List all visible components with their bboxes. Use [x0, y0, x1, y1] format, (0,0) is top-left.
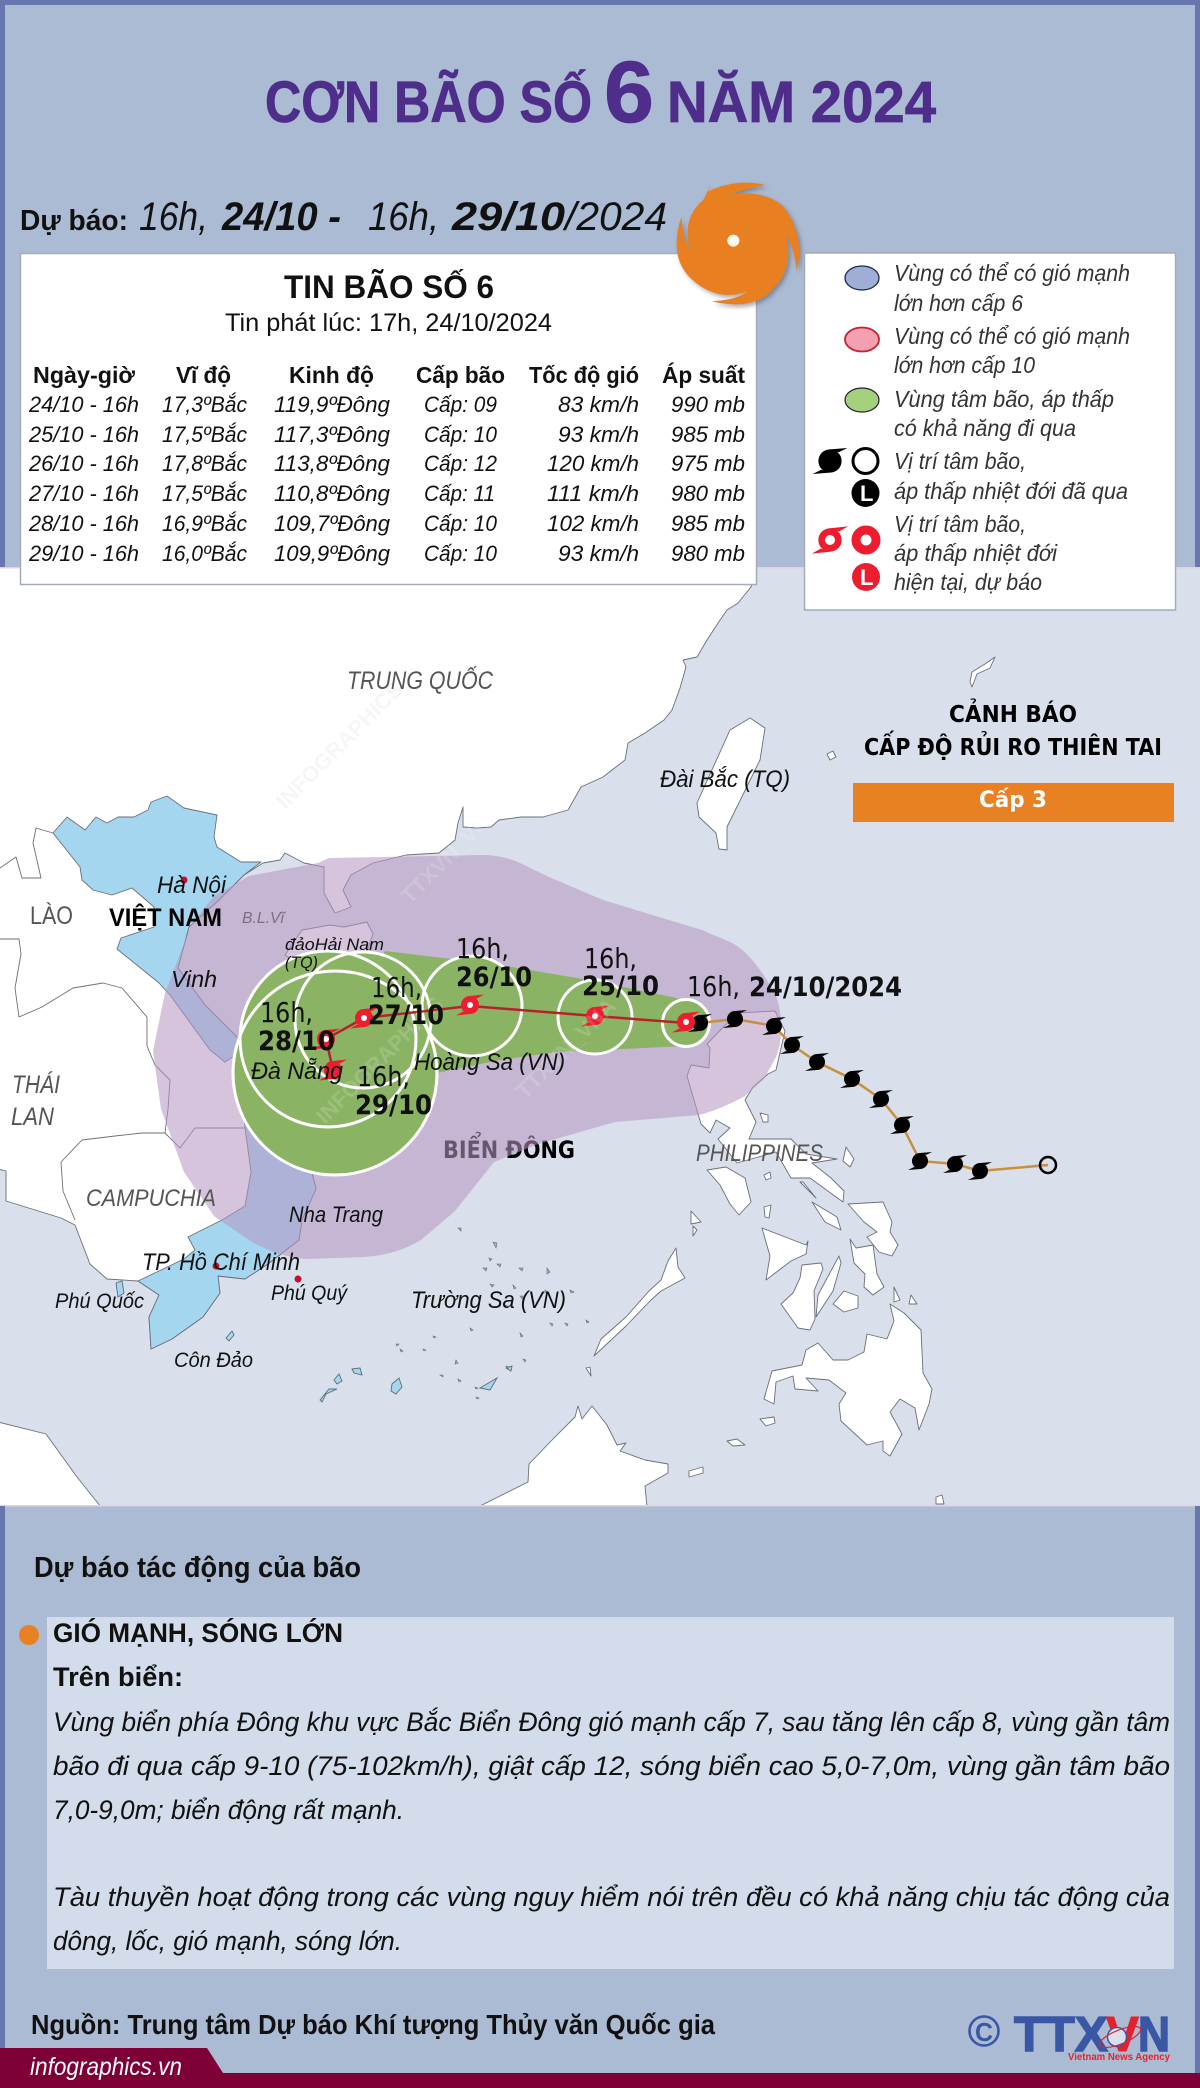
title: CƠN BÃO SỐ: [265, 70, 592, 135]
map labels: places: TP. Hồ Chí Minh: [142, 1249, 300, 1276]
logo: TTXVN: TTX: [1014, 2008, 1108, 2062]
watermarks: INFOGRAPHICS: [271, 677, 408, 814]
logo: TTXVN: V: [1106, 2008, 1139, 2062]
map labels: places: [11, 665, 823, 1372]
table data rows: 985 mb: [671, 511, 745, 536]
watermarks: TTXVN_VNA: [396, 798, 506, 909]
panel: strong wind and waves: [47, 1617, 1174, 1969]
legend: wind above level 10: [845, 323, 1130, 378]
map labels: places: Đà Nẵng: [251, 1057, 344, 1085]
table data rows: 117,3ºĐông: [274, 422, 391, 447]
legend: current and forecast positions: áp thấp nhiệt đới: [894, 540, 1058, 566]
table data rows: [28, 392, 745, 566]
table data rows: 980 mb: [671, 481, 745, 506]
map labels: places: Phú Quốc: [55, 1290, 144, 1313]
table data rows: 111 km/h: [547, 481, 639, 506]
table data rows: 17,5ºBắc: [162, 422, 247, 447]
table data rows: 17,3ºBắc: [162, 392, 247, 417]
table data rows: 16,9ºBắc: [162, 511, 247, 536]
islands: Con Dao, Phu Quoc, Spratly: [116, 1228, 589, 1402]
map labels: places: Vinh: [171, 966, 217, 992]
table header row: Kinh độ: [289, 362, 374, 388]
forecast date line: Dự báo:: [20, 205, 128, 237]
table data rows: 980 mb: [671, 541, 745, 566]
map labels: places: Phú Quý: [271, 1282, 348, 1305]
map labels: storm dates: 25/10: [582, 971, 659, 1002]
map labels: places: LÀO: [30, 901, 73, 930]
forecast date line: 16h,: [139, 195, 208, 239]
panel: strong wind and waves: GIÓ MẠNH, SÓNG LỚN: [53, 1617, 343, 1648]
map top edge line: [0, 567, 1200, 568]
bottom section background: [0, 1505, 1200, 2088]
panel: strong wind and waves: Vùng biển phía Đông khu vực Bắc Biển Đông gió mạnh cấp 7, sau tăng lên cấp 8, vùng gần tâm: [53, 1706, 1170, 1737]
table data rows: 83 km/h: [558, 392, 639, 417]
table data rows: 93 km/h: [558, 422, 639, 447]
map labels: storm dates: 26/10: [456, 962, 532, 993]
table data rows: Cấp: 09: [424, 392, 497, 417]
map labels: places: TRUNG QUỐC: [347, 665, 494, 695]
table data rows: 975 mb: [671, 451, 745, 476]
land: Hainan: [285, 922, 373, 965]
table header row: Cấp bão: [416, 362, 505, 388]
table data rows: 26/10 - 16h: [28, 451, 139, 476]
legend: past positions: L: [860, 481, 873, 506]
forecast date line: /2024: [562, 195, 667, 239]
logo: TTXVN: N: [1138, 2008, 1170, 2062]
watermarks: INFOGRAPHICS: [311, 992, 448, 1129]
map labels: places: Hoàng Sa (VN): [414, 1049, 565, 1076]
map labels: places: Đài Bắc (TQ): [660, 766, 790, 793]
panel: legend: [804, 253, 1176, 610]
icon: orange cyclone: [677, 183, 799, 304]
table data rows: Cấp: 10: [424, 422, 498, 447]
table header row: Áp suất: [662, 361, 745, 388]
panel: strong wind and waves: bão đi qua cấp 9-10 (75-102km/h), giật cấp 12, sóng biển cao 5,0-7,0m, vùng gần tâm bão: [53, 1751, 1170, 1781]
map labels: storm dates: 16h,: [371, 971, 422, 1004]
map labels: storm dates: 24/10/2024: [749, 972, 902, 1003]
table data rows: 27/10 - 16h: [28, 481, 139, 506]
table data rows: 109,7ºĐông: [274, 511, 391, 536]
forecast date line: [20, 195, 667, 239]
land: small northern islands: [827, 657, 995, 760]
footer bar: infographics.vn: [30, 2053, 182, 2081]
land: Borneo: [478, 1406, 668, 1507]
map: [0, 568, 1200, 1507]
panel: strong wind and waves: Tàu thuyền hoạt động trong các vùng nguy hiểm nói trên đều có khả năng chịu tác động của: [53, 1882, 1170, 1912]
label: Bien Dong: BIỂN ĐÔNG: [443, 1130, 575, 1164]
forecast track: [312, 994, 700, 1080]
panel: strong wind and waves: dông, lốc, gió mạnh, sóng lớn.: [53, 1926, 402, 1956]
map labels: places: LAN: [11, 1103, 55, 1131]
table data rows: 120 km/h: [547, 451, 639, 476]
title: NĂM 2024: [667, 70, 936, 135]
map labels: places: THÁI: [12, 1070, 60, 1099]
land: Malay peninsula: [0, 1422, 101, 1507]
map labels: places: Nha Trang: [289, 1202, 384, 1227]
logo: TTXVN: C: [975, 2017, 993, 2047]
legend: storm center zone: [845, 386, 1114, 441]
land: borders: [0, 828, 245, 1220]
table data rows: 28/10 - 16h: [28, 511, 139, 536]
map labels: storm dates: 27/10: [368, 1000, 444, 1031]
forecast date line: 24/10 -: [221, 195, 341, 239]
disaster risk warning: CẢNH BÁO: [949, 698, 1077, 728]
table data rows: Cấp: 11: [424, 481, 495, 506]
legend: storm center zone: có khả năng đi qua: [894, 415, 1076, 441]
watermarks: TTXVN_VNA: [511, 993, 621, 1104]
table data rows: 93 km/h: [558, 541, 639, 566]
logo: TTXVN: Vietnam News Agency: [1068, 2051, 1170, 2063]
impact heading: Dự báo tác động của bão: [34, 1552, 361, 1584]
legend: wind above level 6: Vùng có thể có gió mạnh: [894, 260, 1130, 286]
table data rows: 17,5ºBắc: [162, 481, 247, 506]
table header row: Tốc độ gió: [529, 362, 639, 388]
legend: current and forecast positions: [812, 511, 1058, 595]
map labels: storm dates: [258, 932, 902, 1121]
table header row: Ngày-giờ: [33, 362, 136, 388]
map labels: places: Hà Nội: [157, 872, 227, 899]
land: Vietnam: [53, 796, 316, 1349]
forecast radius circles: [233, 951, 710, 1175]
legend: wind above level 10: lớn hơn cấp 10: [894, 352, 1035, 378]
legend: past positions: Vị trí tâm bão,: [894, 448, 1026, 474]
source: Nguồn: Trung tâm Dự báo Khí tượng Thủy văn Quốc gia: [31, 2009, 715, 2040]
table data rows: Cấp: 12: [424, 451, 497, 476]
table header row: Vĩ độ: [176, 362, 231, 388]
frame bars: [0, 0, 1200, 568]
table data rows: 17,8ºBắc: [162, 451, 247, 476]
map labels: places: Côn Đảo: [174, 1349, 253, 1372]
legend: wind above level 10: Vùng có thể có gió mạnh: [894, 323, 1130, 349]
table data rows: Cấp: 10: [424, 511, 498, 536]
logo: TTXVN: [970, 2008, 1170, 2063]
map labels: storm dates: 16h,: [357, 1060, 410, 1093]
table heading: [225, 269, 552, 337]
legend: storm center zone: Vùng tâm bão, áp thấp: [894, 386, 1114, 412]
legend: current and forecast positions: Vị trí tâm bão,: [894, 511, 1026, 537]
legend: past positions: [813, 448, 1128, 507]
land: Taiwan: [697, 718, 765, 850]
bullet: [19, 1625, 39, 1645]
table data rows: 985 mb: [671, 422, 745, 447]
zone: storm center corridor: [233, 951, 710, 1175]
footer bar: [0, 2048, 1200, 2088]
land: China, Indochina: [0, 568, 757, 1349]
land: Philippines: [586, 1011, 944, 1504]
table data rows: 16,0ºBắc: [162, 541, 247, 566]
map labels: places: Trường Sa (VN): [411, 1287, 566, 1314]
table data rows: Cấp: 10: [424, 541, 498, 566]
zone: strong wind over level 6: [153, 855, 781, 1259]
disaster risk warning: Cấp 3: [979, 788, 1047, 813]
legend: past positions: áp thấp nhiệt đới đã qua: [894, 478, 1128, 504]
legend: wind above level 6: [845, 260, 1130, 316]
map labels: places: CAMPUCHIA: [86, 1185, 216, 1212]
disaster risk warning: CẤP ĐỘ RỦI RO THIÊN TAI: [864, 730, 1162, 761]
legend: current and forecast positions: hiện tại, dự báo: [894, 569, 1042, 595]
table heading: Tin phát lúc: 17h, 24/10/2024: [225, 309, 552, 337]
watermarks: [271, 677, 621, 1129]
forecast date line: 16h,: [368, 195, 439, 239]
map labels: places: đảoHải Nam: [285, 935, 384, 954]
table data rows: 113,8ºĐông: [274, 451, 391, 476]
table data rows: 119,9ºĐông: [274, 392, 391, 417]
map labels: storm dates: 29/10: [355, 1090, 432, 1121]
title: [265, 44, 936, 141]
table data rows: 29/10 - 16h: [28, 541, 139, 566]
map labels: storm dates: 16h,: [260, 996, 313, 1029]
table data rows: 990 mb: [671, 392, 745, 417]
map labels: places: (TQ): [285, 953, 318, 972]
table heading: TIN BÃO SỐ 6: [284, 269, 494, 305]
label: B.L.Vi: B.L.Vĩ: [242, 910, 286, 927]
panel: strong wind and waves: 7,0-9,0m; biển động rất mạnh.: [53, 1795, 404, 1825]
map labels: storm dates: 16h,: [456, 932, 509, 965]
table header row: [33, 361, 745, 388]
map labels: places: VIỆT NAM: [109, 902, 222, 932]
table data rows: 102 km/h: [547, 511, 639, 536]
map labels: storm dates: 16h,: [687, 970, 740, 1003]
map labels: places: PHILIPPINES: [696, 1140, 823, 1167]
forecast date line: 29/10: [451, 195, 565, 239]
panel: storm bulletin table: [20, 254, 756, 584]
legend: wind above level 6: lớn hơn cấp 6: [894, 290, 1023, 316]
panel: strong wind and waves: Trên biển:: [53, 1662, 183, 1692]
map labels: storm dates: 28/10: [258, 1026, 335, 1057]
table data rows: 110,8ºĐông: [274, 481, 391, 506]
table data rows: 109,9ºĐông: [274, 541, 391, 566]
legend: current and forecast positions: L: [860, 565, 873, 590]
map labels: storm dates: 16h,: [584, 942, 637, 975]
table data rows: 25/10 - 16h: [28, 422, 139, 447]
disaster risk warning: [853, 698, 1174, 822]
title: 6: [604, 44, 654, 141]
past track: [688, 1010, 1056, 1180]
table data rows: 24/10 - 16h: [28, 392, 139, 417]
